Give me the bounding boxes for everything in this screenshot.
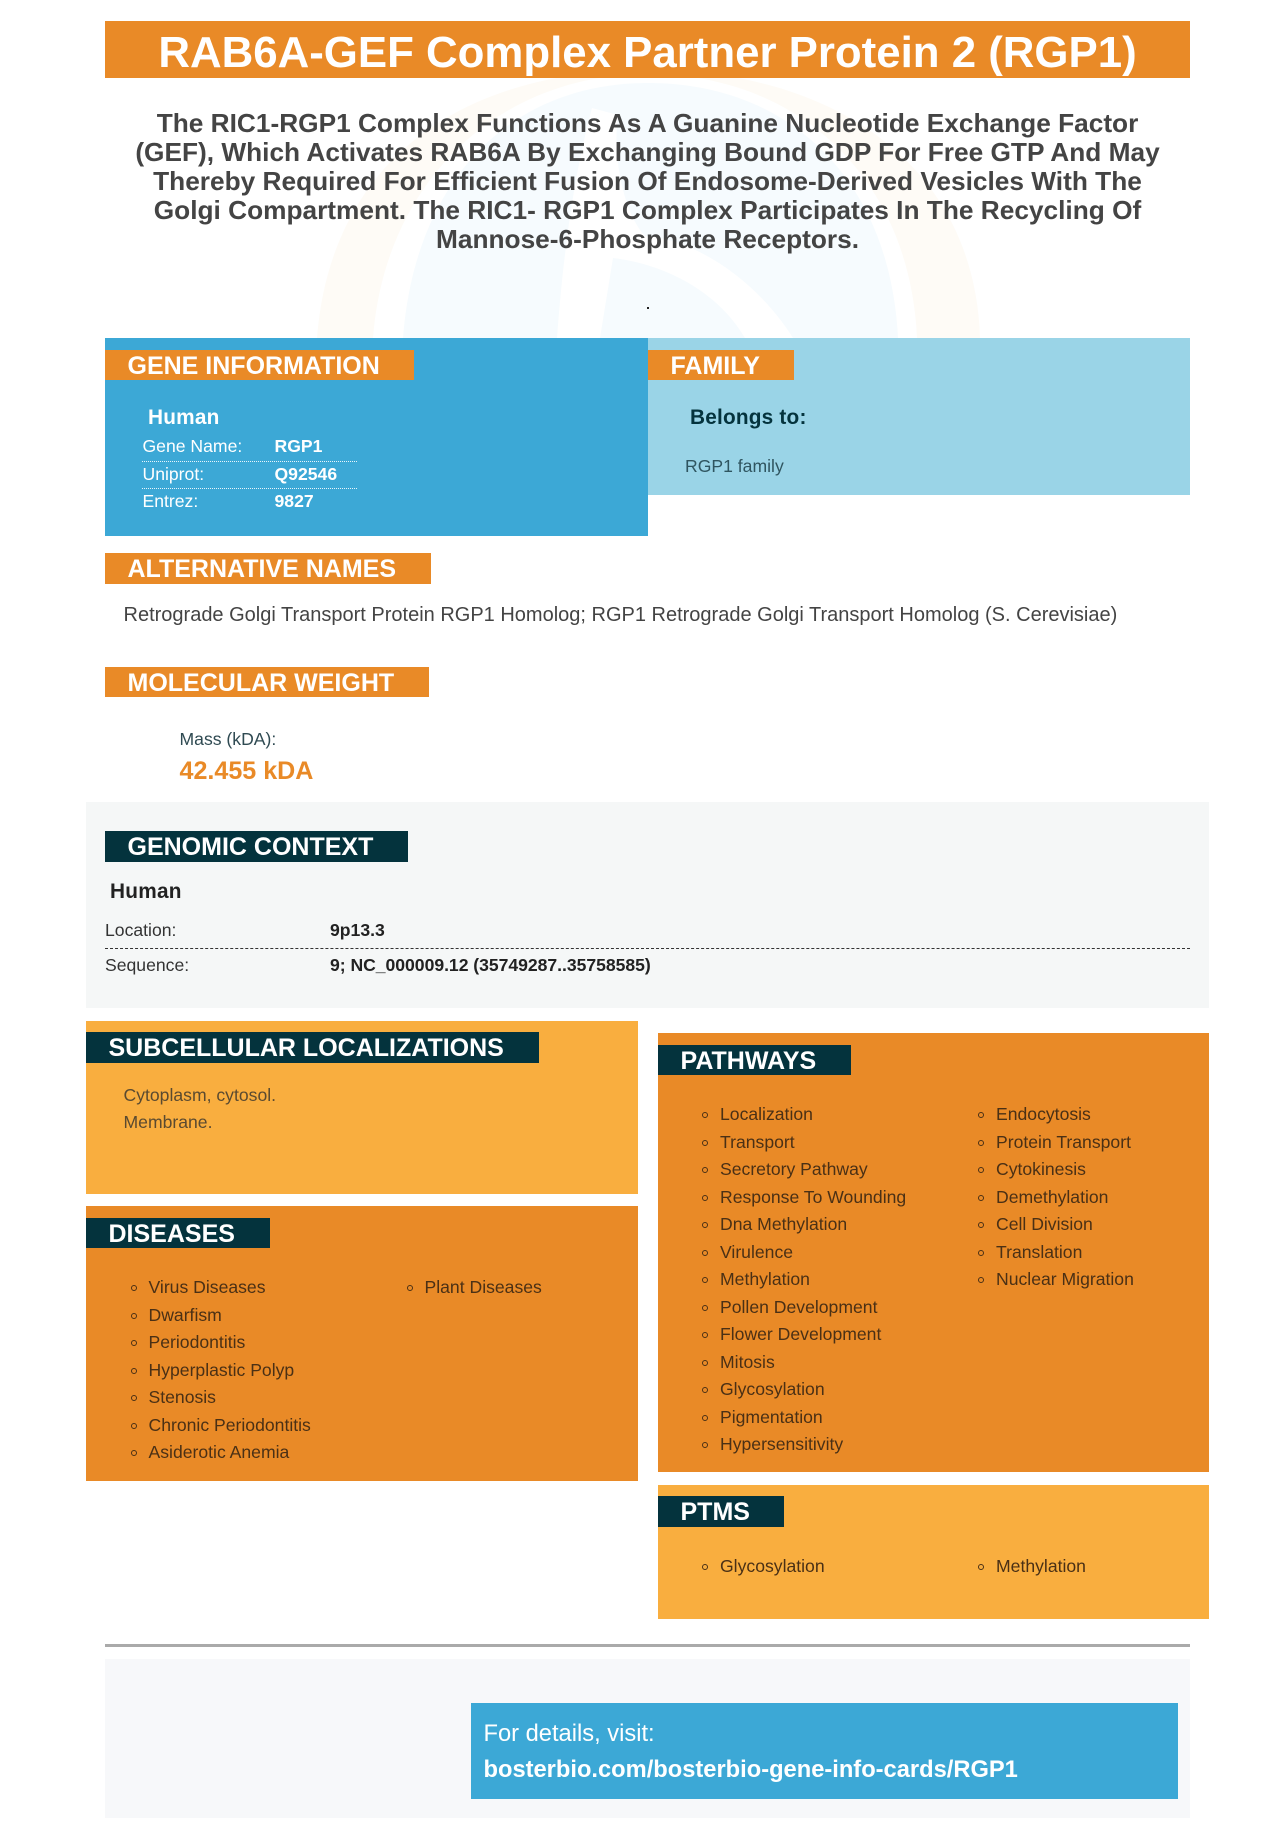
heading: diseases (86, 1218, 270, 1248)
diseases list: Hyperplastic Polyp (148, 1360, 294, 1380)
diseases list (131, 1277, 542, 1462)
alternative names text: Retrograde Golgi Transport Protein RGP1 Homolog; RGP1 Retrograde Golgi Transport Homolog (S. Cerevisiae) (124, 604, 1117, 626)
uniprot value: Q92546 (274, 464, 337, 484)
heading: ptms: PTMS (680, 1498, 750, 1526)
heading: genomic context: GENOMIC CONTEXT (128, 833, 373, 861)
entrez value: 9827 (274, 491, 314, 511)
panel: footer (105, 1659, 1190, 1818)
gene information species: Human (148, 406, 219, 429)
heading: family: FAMILY (670, 352, 760, 380)
pathways list: Endocytosis (996, 1104, 1091, 1124)
description text: Thereby Required For Efficient Fusion Of Endosome-Derived Vesicles With The (153, 166, 1142, 196)
pathways list: Cytokinesis (996, 1159, 1086, 1179)
pathways list: Transport (720, 1132, 795, 1152)
description text: (GEF), Which Activates RAB6A By Exchanging Bound GDP For Free GTP And May (135, 137, 1160, 167)
pathways list: Glycosylation (720, 1379, 825, 1399)
pathways list: Virulence (720, 1242, 793, 1262)
panel: genomic context (86, 802, 1209, 1008)
pathways list: Pigmentation (720, 1407, 823, 1427)
location label: Location: (105, 920, 176, 940)
heading: pathways (658, 1045, 851, 1075)
heading: alternative names: ALTERNATIVE NAMES (128, 555, 396, 583)
diseases list: Plant Diseases (424, 1277, 542, 1297)
panel: pathways (658, 1033, 1209, 1472)
diseases list: Asiderotic Anemia (148, 1442, 289, 1462)
pathways list: Methylation (720, 1269, 810, 1289)
pathways list (702, 1104, 1134, 1454)
pathways list: Flower Development (720, 1324, 881, 1344)
genomic species: Human (110, 880, 182, 903)
diseases list: Stenosis (148, 1387, 216, 1407)
diseases list: Chronic Periodontitis (148, 1415, 311, 1435)
mass label: Mass (kDA): (180, 729, 276, 749)
pathways list: Translation (996, 1242, 1082, 1262)
pathways list: Dna Methylation (720, 1214, 847, 1234)
description text: Golgi Compartment. The RIC1- RGP1 Complex Participates In The Recycling Of (154, 195, 1141, 225)
ptms list: Methylation (996, 1556, 1086, 1576)
family value: RGP1 family (685, 456, 784, 476)
pathways list: Cell Division (996, 1214, 1093, 1234)
heading: diseases: DISEASES (108, 1220, 235, 1248)
diseases list: Virus Diseases (148, 1277, 266, 1297)
heading: pathways: PATHWAYS (680, 1047, 816, 1075)
pathways list: Response To Wounding (720, 1187, 906, 1207)
diseases list: Dwarfism (148, 1305, 222, 1325)
callout label: For details, visit: (484, 1721, 655, 1747)
heading: ptms (658, 1496, 784, 1527)
title: RAB6A-GEF Complex Partner Protein 2 (RGP1) (158, 28, 1137, 77)
gene name value: RGP1 (274, 436, 322, 456)
description text (135, 108, 1160, 254)
pathways list: Mitosis (720, 1352, 775, 1372)
small dot (647, 307, 649, 309)
heading: subcellular localizations: SUBCELLULAR LOCALIZATIONS (108, 1034, 504, 1062)
watermark logo (317, 78, 980, 338)
uniprot label: Uniprot: (142, 464, 204, 484)
belongs to label: Belongs to: (690, 406, 807, 429)
pathways list: Protein Transport (996, 1132, 1131, 1152)
panel: ptms (658, 1485, 1209, 1619)
description text: The RIC1-RGP1 Complex Functions As A Guanine Nucleotide Exchange Factor (157, 108, 1138, 138)
panel: subcellular localizations (86, 1021, 638, 1194)
sequence value: 9; NC_000009.12 (35749287..35758585) (330, 955, 651, 975)
location value: 9p13.3 (330, 920, 385, 940)
panel: family (648, 338, 1190, 495)
ptms list: Glycosylation (720, 1556, 825, 1576)
pathways list: Hypersensitivity (720, 1434, 843, 1454)
pathways list: Demethylation (996, 1187, 1108, 1207)
description text: Mannose-6-Phosphate Receptors. (436, 224, 859, 254)
pathways list: Localization (720, 1104, 813, 1124)
sequence label: Sequence: (105, 955, 189, 975)
gene name label: Gene Name: (142, 436, 242, 456)
panel: gene information (105, 338, 648, 536)
callout: details link (471, 1703, 1178, 1799)
pathways list: Nuclear Migration (996, 1269, 1134, 1289)
localization line 1: Cytoplasm, cytosol. (124, 1085, 276, 1105)
heading: family (648, 350, 794, 380)
diseases list: Periodontitis (148, 1332, 245, 1352)
entrez label: Entrez: (142, 491, 198, 511)
mass value: 42.455 kDA (180, 757, 313, 785)
panel: diseases (86, 1206, 638, 1481)
heading: molecular weight: MOLECULAR WEIGHT (128, 669, 394, 697)
pathways list: Pollen Development (720, 1297, 877, 1317)
callout url: bosterbio.com/bosterbio-gene-info-cards/RGP1 (484, 1757, 1018, 1783)
pathways list: Secretory Pathway (720, 1159, 868, 1179)
localization line 2: Membrane. (124, 1112, 212, 1132)
heading: gene information: GENE INFORMATION (128, 352, 380, 380)
